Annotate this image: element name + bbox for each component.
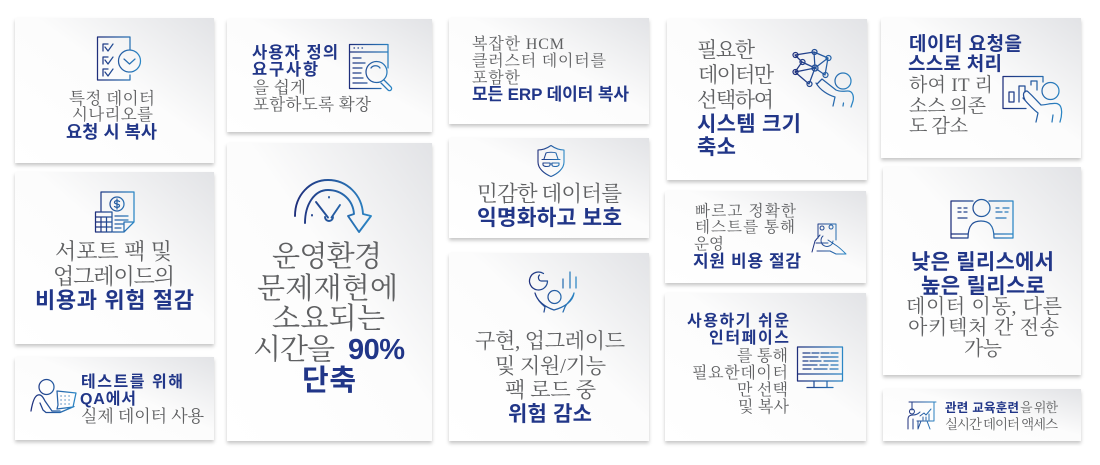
icon: checklist with clock xyxy=(98,37,140,80)
text: release migration: 낮은 릴리스에서 xyxy=(911,251,1054,274)
panel: customization xyxy=(227,19,432,132)
panel: release migration xyxy=(883,167,1081,375)
text: reduce system size: 축소 xyxy=(697,136,736,159)
text: release migration: 아키텍처 간 전송 xyxy=(908,316,1059,339)
text: self service: 하여 IT 리 xyxy=(909,74,993,96)
panel: reduce system size xyxy=(667,19,867,180)
text: support pack cost: 비용과 위험 절감 xyxy=(35,288,194,313)
text: 90 percent reduction: 운영환경 xyxy=(272,240,382,273)
text: self service: 도 감소 xyxy=(909,115,968,137)
text: support pack cost: 업그레이드의 xyxy=(53,264,175,289)
icon: person with laptop xyxy=(31,380,76,412)
text: 90 percent reduction xyxy=(253,240,405,397)
text: QA real data: QA에서 xyxy=(80,390,136,408)
text: 90 percent reduction: 단축 xyxy=(302,364,356,397)
panel: training xyxy=(883,389,1081,441)
panel: easy interface xyxy=(665,293,866,441)
text: lower support cost: 운영 xyxy=(694,235,724,253)
text: customization: 사용자 정의 xyxy=(252,43,338,62)
icon: network with person xyxy=(793,50,853,107)
text: training: 을 위한 xyxy=(1020,400,1058,415)
icon: person at screen xyxy=(951,200,1013,238)
text: customization xyxy=(252,43,371,114)
text: self service: 데이터 요청을 xyxy=(909,33,1022,55)
text: easy interface: 만 선택 xyxy=(737,380,788,399)
icon: presenter at board xyxy=(908,402,936,429)
text: HCM ERP copy: 포함한 xyxy=(472,68,521,87)
text: support pack cost xyxy=(35,239,194,313)
text: reduce system size xyxy=(697,38,801,159)
text: release migration: 높은 릴리스로 xyxy=(921,275,1045,298)
icon: desktop monitor xyxy=(798,347,842,388)
text: easy interface: 인터페이스 xyxy=(709,329,789,347)
panel: support pack cost xyxy=(15,172,214,344)
text: support pack cost: 서포트 팩 및 xyxy=(55,239,172,264)
text: training xyxy=(945,400,1058,432)
text: easy interface xyxy=(687,312,790,416)
text: HCM ERP copy: 클러스터 데이터를 xyxy=(472,51,607,70)
text: training: 관련 교육훈련 xyxy=(945,401,1019,415)
text: QA real data: 실제 데이터 사용 xyxy=(81,406,205,426)
text: reduce system size: 데이터만 xyxy=(698,63,775,87)
text: HCM ERP copy: 모든 ERP 데이터 복사 xyxy=(472,85,629,104)
text: reduce risk: 팩 로드 중 xyxy=(505,378,596,402)
text: anonymize: 민감한 데이터를 xyxy=(477,182,622,206)
text: reduce system size: 필요한 xyxy=(697,38,756,62)
text: customization: 포함하도록 확장 xyxy=(253,94,371,114)
text: release migration: 데이터 이동, 다른 xyxy=(906,295,1062,318)
icon: person raising hands xyxy=(530,272,576,312)
panel: QA real data xyxy=(15,357,214,440)
text: easy interface: 및 복사 xyxy=(738,397,790,416)
text: customization: 을 쉽게 xyxy=(253,77,306,97)
text: 90 percent reduction: 90% xyxy=(348,334,405,366)
text: anonymize xyxy=(477,182,622,230)
panel: lower support cost xyxy=(665,191,866,283)
text: HCM ERP copy xyxy=(472,34,629,104)
icon: hands holding tablet xyxy=(812,224,846,254)
icon: clock with arrow xyxy=(295,180,371,232)
text: on-demand copy xyxy=(66,88,157,142)
text: release migration xyxy=(906,251,1062,360)
text: reduce risk: 위험 감소 xyxy=(508,403,592,426)
text: reduce risk xyxy=(475,329,625,426)
panel: HCM ERP copy xyxy=(449,18,649,124)
text: lower support cost xyxy=(693,201,801,271)
text: HCM ERP copy: 복잡한 HCM xyxy=(472,34,564,53)
text: QA real data: 테스트를 위해 xyxy=(81,373,183,391)
text: customization: 요구사항 xyxy=(252,60,318,79)
panel: 90 percent reduction xyxy=(227,143,432,441)
text: reduce system size: 시스템 크기 xyxy=(697,113,801,136)
text: easy interface: 를 통해 xyxy=(737,346,788,365)
text: QA real data xyxy=(80,373,205,426)
text: easy interface: 사용하기 쉬운 xyxy=(687,312,789,330)
text: 90 percent reduction: 문제재현에 xyxy=(257,272,398,305)
icon: invoice and calculator xyxy=(96,192,134,232)
text: on-demand copy: 요청 시 복사 xyxy=(66,122,157,142)
text: lower support cost: 테스트를 통해 xyxy=(695,217,795,236)
text: 90 percent reduction: 소요되는 xyxy=(272,302,385,335)
text: self service xyxy=(908,33,1022,137)
panel: anonymize xyxy=(449,138,649,238)
panel: on-demand copy xyxy=(15,18,214,163)
icon: window with magnifier xyxy=(350,44,392,91)
panel: reduce risk xyxy=(449,253,649,441)
text: reduce risk: 구현, 업그레이드 xyxy=(475,329,625,353)
icon: shield with spy hat xyxy=(538,146,564,176)
text: 90 percent reduction: 시간을 xyxy=(253,333,335,366)
text: lower support cost: 지원 비용 절감 xyxy=(693,252,801,271)
text: reduce risk: 및 지원/기능 xyxy=(495,354,606,378)
text: lower support cost: 빠르고 정확한 xyxy=(695,201,796,220)
text: on-demand copy: 특정 데이터 xyxy=(69,88,155,108)
text: release migration: 가능 xyxy=(964,337,1002,360)
text: easy interface: 필요한데이터 xyxy=(692,363,788,382)
text: training: 실시간 데이터 액세스 xyxy=(945,416,1058,432)
text: self service: 소스 의존 xyxy=(909,95,986,117)
text: reduce system size: 선택하여 xyxy=(697,88,774,112)
text: self service: 스스로 처리 xyxy=(908,53,1002,75)
text: anonymize: 익명화하고 보호 xyxy=(477,206,622,230)
text: on-demand copy: 시나리오를 xyxy=(72,104,153,124)
icon: person at chart board xyxy=(1003,76,1062,122)
panel: self service xyxy=(881,18,1081,158)
